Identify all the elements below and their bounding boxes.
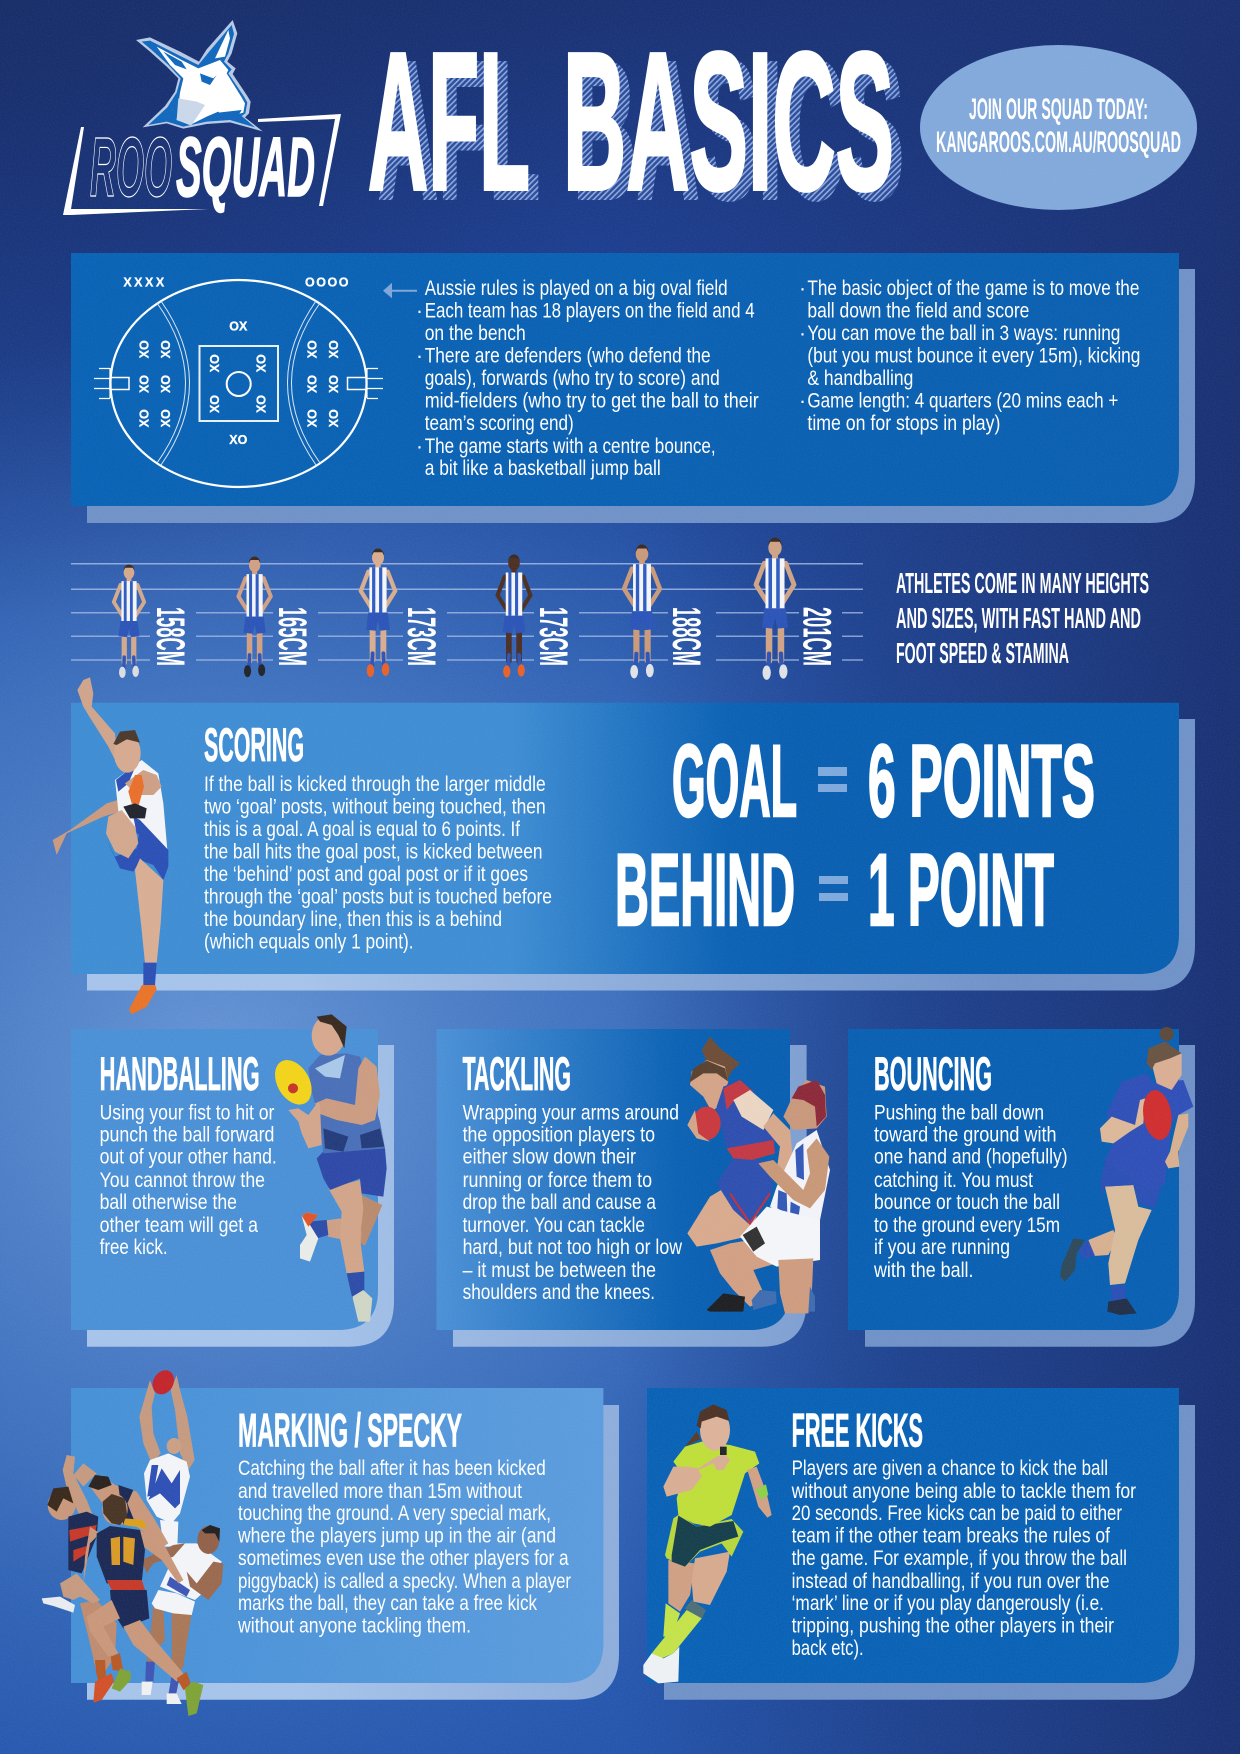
text: free kicks body: ‘mark’ line or if you play dangerously (i.e. (792, 1592, 1104, 1615)
text: overview right column: The basic object of the game is to move the (807, 277, 1139, 300)
logo wordmark: ROO (90, 120, 172, 214)
field diagram: XO (327, 375, 341, 393)
text: tackling body: turnover. You can tackle (463, 1214, 645, 1237)
stat: goal equals 6 points: GOAL (672, 724, 797, 838)
panel: free kicks (643, 1388, 1195, 1700)
logo: Roo Squad (63, 20, 341, 215)
text: scoring body: the ball hits the goal post, is kicked between (204, 840, 542, 863)
panel: tackling: TACKLING (463, 1047, 571, 1100)
text: handballing body (100, 1101, 277, 1259)
field diagram: XO (306, 340, 320, 358)
text: bouncing body: one hand and (hopefully) (874, 1146, 1068, 1169)
player: 173cm second (498, 555, 530, 678)
text: marking body (237, 1457, 571, 1638)
field diagram: XO (255, 354, 269, 372)
panel: bouncing: BOUNCING (874, 1047, 992, 1100)
field diagram: XO (208, 395, 222, 413)
text: tackling body: hard, but not too high or low (463, 1236, 683, 1259)
player: tacklers (687, 1037, 830, 1313)
text: overview right column: · (799, 322, 806, 345)
chart: player heights: 201CM (794, 607, 838, 666)
field diagram: OOOO (305, 276, 350, 290)
text: overview left column: team’s scoring end) (425, 412, 574, 435)
text: overview left column: Aussie rules is played on a big oval field (425, 277, 728, 300)
text: tackling body: the opposition players to (463, 1124, 655, 1147)
player: handballer (267, 1014, 387, 1322)
text: tackling body: running or force them to (463, 1169, 652, 1192)
text: marking body: where the players jump up in the air (and (237, 1525, 556, 1548)
text: overview left column: · (416, 435, 423, 458)
text: bouncing body: if you are running (874, 1236, 1010, 1259)
panel: scoring: SCORING (204, 718, 304, 771)
field diagram: XO (137, 409, 151, 427)
text: tackling body: either slow down their (463, 1146, 636, 1169)
text: free kicks body: instead of handballing, if you run over the (792, 1570, 1110, 1593)
chart: player heights: 165CM (270, 607, 314, 666)
panel: free kicks: FREE KICKS (792, 1404, 923, 1456)
text: marking body: touching the ground. A very special mark, (238, 1502, 551, 1525)
text: overview left column: Each team has 18 players on the field and 4 (425, 300, 755, 323)
chart: player heights: 158CM (148, 607, 192, 666)
text: free kicks body: team if the other team breaks the rules of (792, 1525, 1110, 1548)
text: bouncing body: with the ball. (873, 1259, 974, 1282)
text: free kicks body: the game. For example, if you throw the ball (792, 1547, 1127, 1570)
text: handballing body: Using your fist to hit or (100, 1101, 274, 1124)
text: marking body: marks the ball, they can take a free kick (238, 1592, 537, 1615)
logo frame (63, 114, 341, 215)
text: free kicks body: tripping, pushing the other players in their (792, 1615, 1114, 1638)
text: overview right column: · (799, 277, 806, 300)
text: handballing body: punch the ball forward (100, 1124, 274, 1147)
player: umpire (643, 1404, 772, 1683)
text: overview left column: goals), forwards (who try to score) and (425, 367, 720, 390)
text: handballing body: out of your other hand. (100, 1146, 277, 1169)
panel: marking specky (42, 1366, 619, 1716)
field diagram: XO (255, 395, 269, 413)
panel: tackling (436, 1029, 830, 1347)
text: scoring body (204, 773, 552, 953)
title: AFL BASICS (368, 12, 904, 240)
text: marking body: without anyone tackling them. (237, 1615, 471, 1638)
title hatched shadow: AFL (378, 21, 540, 240)
text: overview left column: on the bench (425, 322, 526, 345)
text: scoring body: the ‘behind’ post and goal post or if it goes (204, 863, 528, 886)
text: bouncing body: to the ground every 15m (874, 1214, 1060, 1237)
players: contesting a mark (42, 1366, 223, 1716)
text: overview left column: mid-fielders (who try to get the ball to their (425, 390, 759, 413)
text: bouncing body: catching it. You must (874, 1169, 1033, 1192)
chart: player heights: 173CM (399, 607, 443, 666)
field diagram: XO (229, 433, 248, 447)
logo: Roo Squad: SQUAD (176, 120, 315, 214)
text: overview left column: The game starts with a centre bounce, (425, 435, 716, 458)
icon: kangaroo head (136, 20, 263, 131)
text: tackling body: drop the ball and cause a (463, 1191, 656, 1214)
text: free kicks body (791, 1457, 1136, 1660)
field diagram: XO (159, 375, 173, 393)
panel: marking specky: MARKING / SPECKY (238, 1404, 462, 1456)
text: scoring body: the boundary line, then this is a behind (204, 908, 502, 931)
text: overview right column: & handballing (807, 367, 913, 390)
text: free kicks body: back etc). (792, 1637, 864, 1660)
text: overview right column: · (799, 390, 806, 413)
text: marking body: and travelled more than 15m without (238, 1480, 522, 1503)
text: free kicks body: 20 seconds. Free kicks can be paid to either (792, 1502, 1122, 1525)
field diagram (94, 276, 383, 487)
chart: player heights: 188CM (664, 607, 708, 666)
field diagram: XO (137, 340, 151, 358)
field diagram: XO (208, 354, 222, 372)
text: marking body: sometimes even use the other players for a (238, 1547, 569, 1570)
player: 158cm (114, 564, 144, 678)
text: overview right column: Game length: 4 quarters (20 mins each + (807, 390, 1118, 413)
text: tackling body: shoulders and the knees. (463, 1281, 655, 1304)
text: tackling body: Wrapping your arms around (463, 1101, 679, 1124)
field diagram: XO (327, 409, 341, 427)
field diagram: XO (327, 340, 341, 358)
field diagram: XO (159, 409, 173, 427)
text: handballing body: free kick. (100, 1236, 168, 1259)
text: overview right column (799, 277, 1140, 435)
field diagram: XO (159, 340, 173, 358)
text: free kicks body: Players are given a chance to kick the ball (792, 1457, 1108, 1480)
text: bouncing body: toward the ground with (874, 1124, 1056, 1147)
text: athletes heights note (896, 568, 1149, 670)
text: scoring body: If the ball is kicked through the larger middle (204, 773, 546, 796)
text: free kicks body: without anyone being able to tackle them for (791, 1480, 1136, 1503)
stat: behind equals 1 point: BEHIND (615, 833, 795, 947)
text: handballing body: other team will get a (100, 1214, 258, 1237)
panel: scoring (53, 677, 1195, 1014)
panel: handballing: HANDBALLING (100, 1047, 260, 1100)
chart: player heights (71, 538, 863, 680)
text: overview left column: · (416, 300, 423, 323)
field diagram: XXXX (123, 276, 167, 290)
player: kicker (53, 677, 168, 1014)
field diagram: XO (306, 409, 320, 427)
text: overview left column: There are defenders (who defend the (425, 345, 711, 368)
text: overview right column: ball down the field and score (807, 300, 1029, 323)
player: 165cm (238, 557, 271, 677)
text: scoring body: (which equals only 1 point). (204, 930, 414, 953)
text: overview right column: (but you must bounce it every 15m), kicking (807, 345, 1140, 368)
text: scoring body: two ‘goal’ posts, without being touched, then (204, 795, 546, 818)
text: bouncing body: Pushing the ball down (874, 1101, 1044, 1124)
text: overview left column: · (416, 345, 423, 368)
player: 173cm (361, 549, 395, 677)
field diagram: XO (306, 375, 320, 393)
text: tackling body: – it must be between the (463, 1259, 656, 1282)
title lettering: AFL (368, 12, 530, 231)
text: bouncing body: bounce or touch the ball (874, 1191, 1060, 1214)
text: bouncing body (873, 1101, 1068, 1282)
text: overview left column: a bit like a basketball jump ball (425, 457, 661, 480)
field diagram: XO (137, 375, 151, 393)
text: overview right column: You can move the ball in 3 ways: running (807, 322, 1120, 345)
text: marking body: Catching the ball after it has been kicked (238, 1457, 546, 1480)
panel: overview (71, 253, 1195, 523)
text: athletes heights note: FOOT SPEED & STAMINA (896, 638, 1069, 670)
text: scoring body: this is a goal. A goal is equal to 6 points. If (204, 818, 520, 841)
text: handballing body: You cannot throw the (100, 1169, 265, 1192)
player: bouncer (1060, 1027, 1193, 1315)
stat: goal equals 6 points (672, 724, 1095, 838)
field diagram: OX (229, 320, 248, 334)
text: tackling body (463, 1101, 683, 1304)
panel: bouncing (848, 1027, 1195, 1347)
text: marking body: piggyback) is called a specky. When a player (238, 1570, 571, 1593)
panel: handballing (71, 1014, 394, 1347)
chart: player heights: 173CM (531, 607, 575, 666)
callout: join our squad (920, 45, 1197, 210)
text: overview right column: time on for stops in play) (807, 412, 1000, 435)
text: scoring body: through the ‘goal’ posts but is touched before (204, 885, 552, 908)
text: overview left column (416, 277, 759, 480)
text: handballing body: ball otherwise the (100, 1191, 237, 1214)
arrow (383, 283, 417, 298)
player: 201cm (756, 538, 794, 680)
player: 188cm (624, 545, 660, 678)
